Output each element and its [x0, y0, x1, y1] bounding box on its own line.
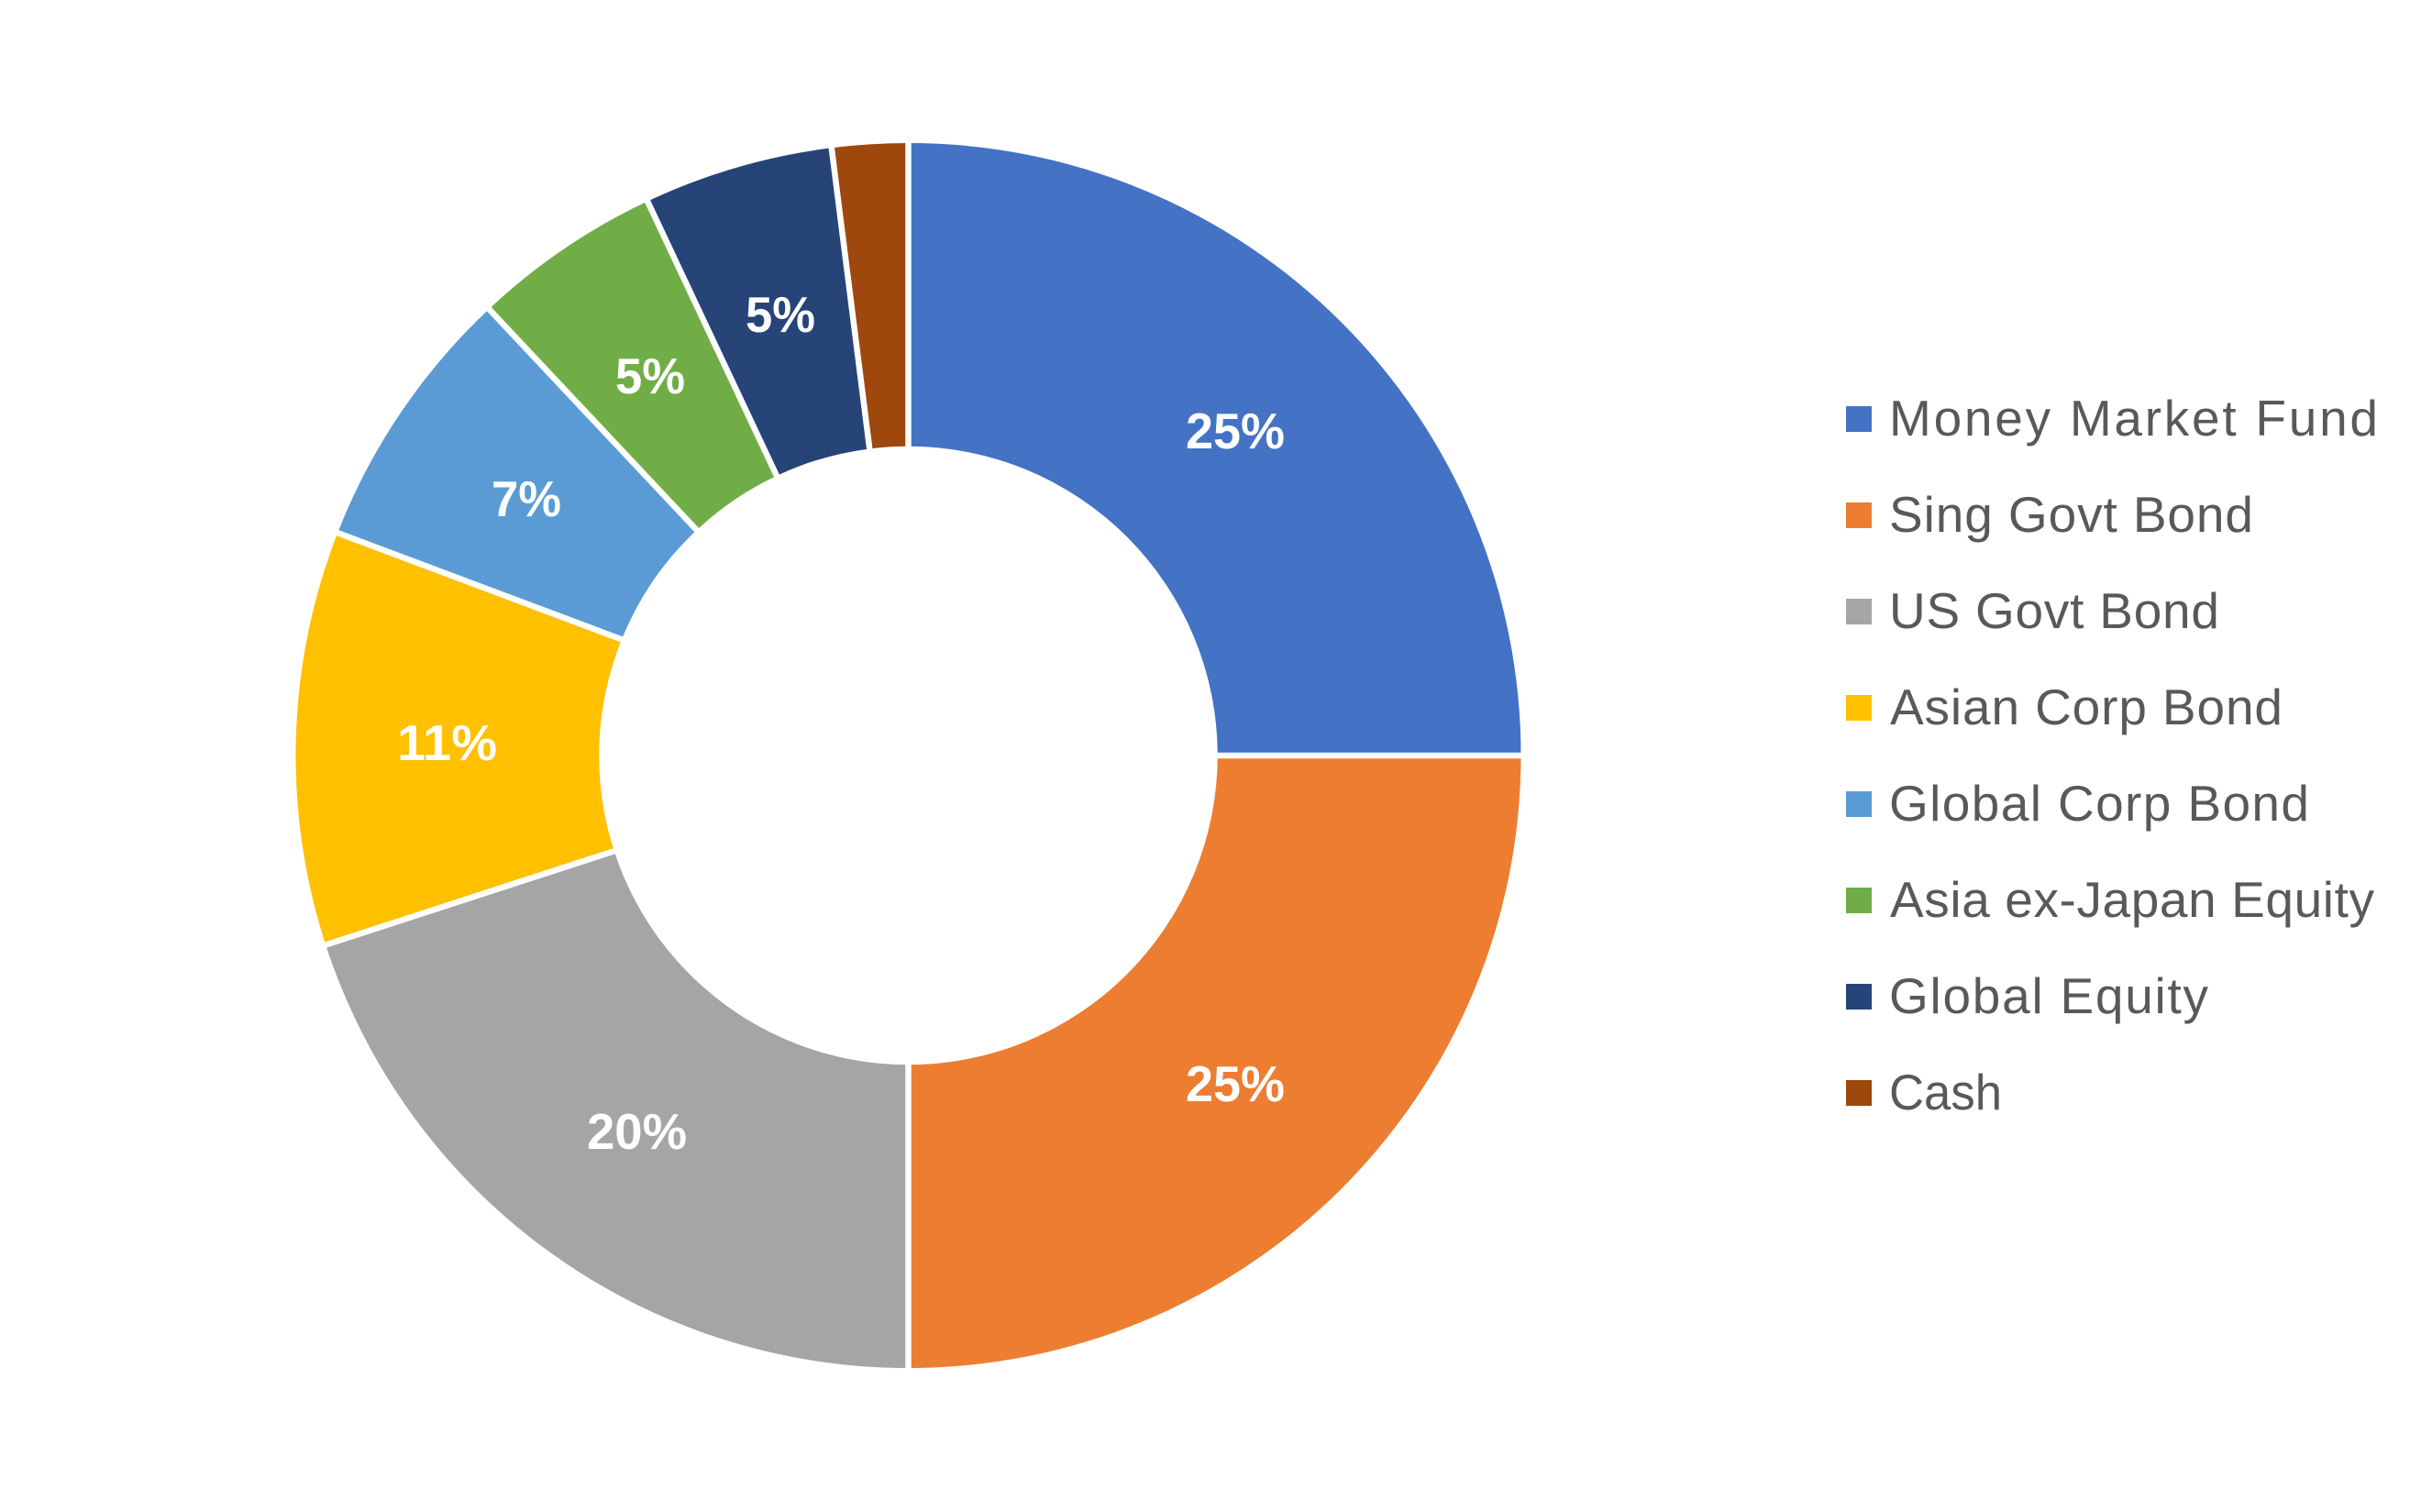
data labels — [397, 286, 1285, 1160]
legend item: Asia ex-Japan Equity: Asia ex-Japan Equity — [1890, 871, 2375, 928]
legend item: Asian Corp Bond: Asian Corp Bond — [1890, 679, 2283, 735]
legend item: Money Market Fund: Money Market Fund — [1889, 390, 2378, 447]
legend item: Global Equity: Global Equity — [1889, 967, 2208, 1024]
segment: Asian Corp Bond 11% — [295, 530, 621, 944]
label: 11% asian corp: 11% — [397, 714, 497, 771]
segment: Cash 2% — [832, 143, 908, 448]
legend item: Cash: Cash — [1889, 1064, 2002, 1120]
legend item: Sing Govt Bond: Sing Govt Bond — [1889, 486, 2253, 543]
legend item: US Govt Bond: US Govt Bond — [1889, 582, 2219, 639]
segment: US Govt Bond 20% — [326, 851, 908, 1368]
segment: Money Market Fund 25% — [908, 143, 1520, 756]
legend item: Global Corp Bond: Global Corp Bond — [1889, 775, 2309, 832]
segment: Asia ex-Japan Equity 5% — [489, 202, 777, 530]
label: 20% us govt: 20% — [587, 1103, 687, 1160]
segment: Global Equity 5% — [647, 148, 869, 476]
label: 25% sing govt: 25% — [1186, 1055, 1285, 1112]
donut chart — [295, 138, 1526, 1373]
label: 7% global corp: 7% — [492, 470, 561, 527]
donut ring — [295, 138, 1526, 1373]
label: 25% money market: 25% — [1186, 403, 1285, 459]
legend — [1846, 390, 2378, 1120]
label: 5% global equity: 5% — [746, 286, 815, 343]
segment: Global Corp Bond 7% — [338, 309, 697, 642]
segment: Sing Govt Bond 25% — [908, 756, 1520, 1368]
label: 5% asia ex-japan: 5% — [615, 348, 685, 404]
